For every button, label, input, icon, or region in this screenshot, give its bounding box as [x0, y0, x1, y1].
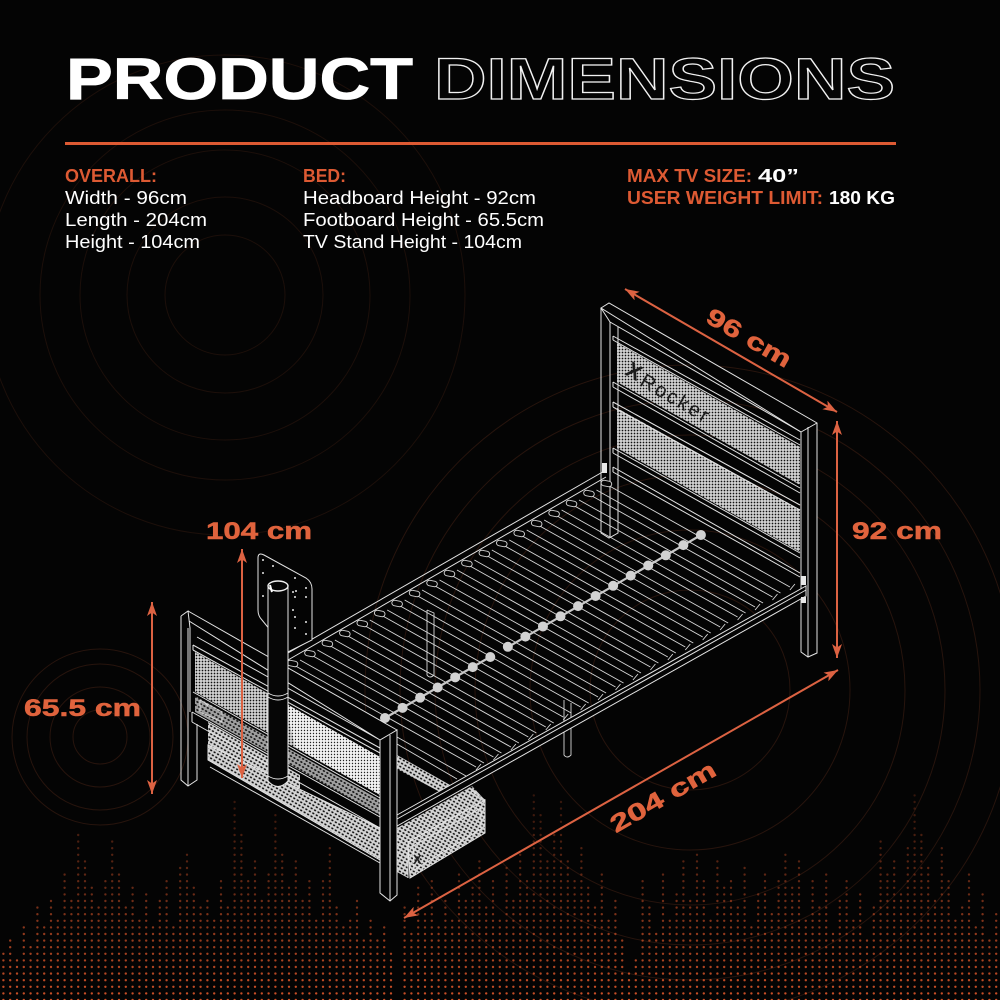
corner brackets	[602, 463, 806, 603]
arrow: 104 cm tv stand height	[241, 549, 243, 778]
headboard	[601, 303, 817, 657]
drawer logo: X	[413, 852, 422, 867]
label: 92 cm: 92 cm	[852, 518, 942, 545]
arrow: 204 cm length	[404, 670, 838, 918]
tv and weight specs: 180 KG	[829, 188, 895, 208]
title	[66, 47, 895, 112]
slats	[292, 484, 790, 767]
overall specs: Height - 104cm	[65, 232, 200, 252]
label: 65.5 cm: 65.5 cm	[24, 695, 141, 722]
basket strip under slats	[397, 755, 450, 792]
under-bed drawer	[397, 786, 485, 878]
arrow: 65.5 cm footboard height	[151, 602, 153, 794]
near side rail	[397, 586, 806, 826]
bed specs: BED:	[303, 166, 346, 186]
overall specs: OVERALL:	[65, 166, 157, 186]
foot left post	[181, 611, 190, 712]
under-bed legs	[427, 610, 571, 757]
bed specs: Headboard Height - 92cm	[303, 188, 536, 208]
label: 104 cm: 104 cm	[206, 518, 312, 545]
bed illustration	[181, 303, 817, 901]
title: product: PRODUCT	[66, 47, 413, 112]
lower mesh strip	[195, 696, 380, 815]
footboard and basket	[181, 611, 397, 901]
basket floor mesh	[208, 745, 380, 860]
bed specs: TV Stand Height - 104cm	[303, 232, 522, 252]
bed frame and slats	[288, 463, 806, 826]
arrow: 92 cm headboard height	[836, 421, 838, 658]
footboard mesh panel	[195, 652, 380, 795]
footboard rails	[181, 611, 397, 828]
footboard backing	[188, 611, 397, 860]
title: dimensions outline: DIMENSIONS	[434, 47, 895, 112]
overall specs	[65, 166, 207, 252]
bed specs: Footboard Height - 65.5cm	[303, 210, 544, 230]
headboard mesh panels	[617, 343, 800, 485]
slat end ticks	[476, 584, 795, 770]
arrow: 96 cm width	[625, 289, 837, 412]
pole	[268, 586, 288, 786]
tv and weight specs	[627, 166, 895, 208]
headboard logo: X	[622, 357, 647, 386]
label: 204 cm: 204 cm	[605, 756, 721, 839]
tv and weight specs: 40”	[758, 166, 799, 186]
mounting plate	[258, 554, 312, 652]
halftone spectrum dots	[3, 790, 996, 1000]
tv and weight specs: USER WEIGHT LIMIT:	[627, 188, 823, 208]
plate holes	[262, 559, 307, 635]
headboard logo: Rocker	[636, 370, 715, 428]
far side rail	[288, 470, 606, 660]
bed specs	[303, 166, 544, 252]
center strap	[385, 535, 701, 718]
headboard logo	[620, 357, 717, 428]
label: 96 cm: 96 cm	[701, 303, 796, 374]
foot right post	[380, 730, 397, 901]
overall specs: Width - 96cm	[65, 188, 187, 208]
slats near footboard	[397, 737, 466, 779]
headboard rails	[613, 336, 800, 577]
tv stand	[258, 554, 312, 786]
basket back wall	[208, 722, 300, 800]
overall specs: Length - 204cm	[65, 210, 207, 230]
footboard bracket	[200, 700, 222, 722]
drawer front	[408, 800, 485, 878]
tv and weight specs: MAX TV SIZE:	[627, 166, 752, 186]
slat clips	[290, 483, 609, 664]
divider rule	[65, 142, 896, 145]
